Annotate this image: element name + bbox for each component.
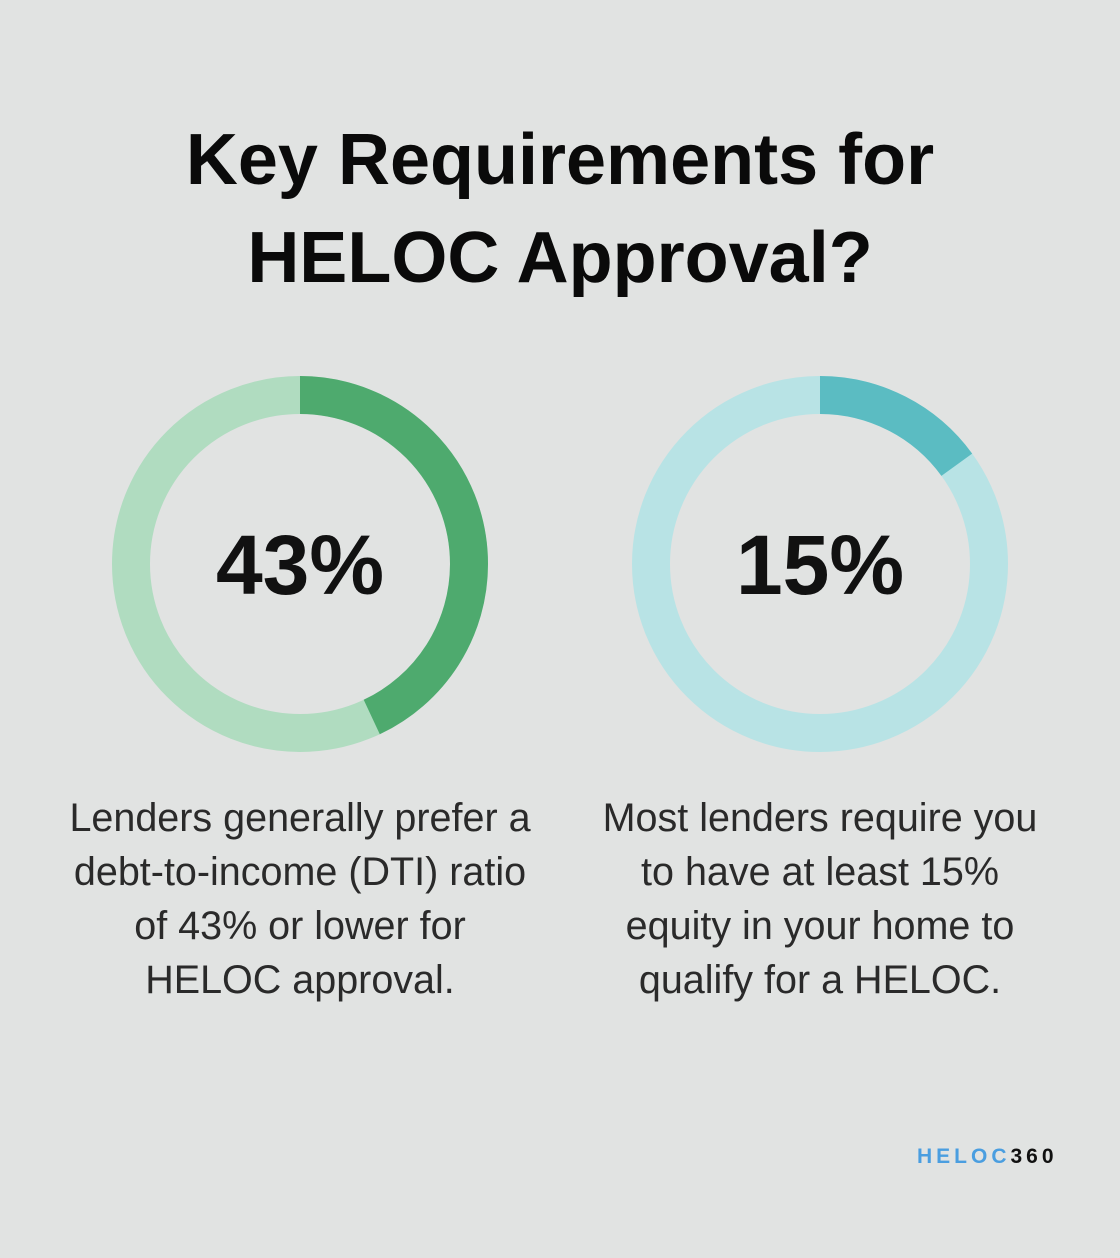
text: DTI: of 43% or lower for [134, 904, 466, 948]
text: equity [603, 796, 1037, 1002]
donut chart: 43% [112, 376, 488, 752]
title: HELOC Approval? [247, 218, 873, 298]
text: DTI: HELOC approval. [145, 958, 455, 1002]
title: Key Requirements for [186, 120, 934, 200]
text: equity: equity in your home to [626, 904, 1014, 948]
text: DTI: debt-to-income (DTI) ratio [74, 850, 526, 894]
text: DTI [69, 796, 531, 1002]
text: equity: qualify for a HELOC. [639, 958, 1001, 1002]
donut chart: 15% [632, 376, 1008, 752]
stat: 15%: 15% [736, 518, 904, 612]
text: equity: to have at least 15% [641, 850, 999, 894]
stat: 43%: 43% [216, 518, 384, 612]
logo: HELOC360 [917, 1145, 1058, 1168]
text: equity: Most lenders require you [603, 796, 1037, 840]
text: DTI: Lenders generally prefer a [69, 796, 531, 840]
title [186, 120, 934, 298]
